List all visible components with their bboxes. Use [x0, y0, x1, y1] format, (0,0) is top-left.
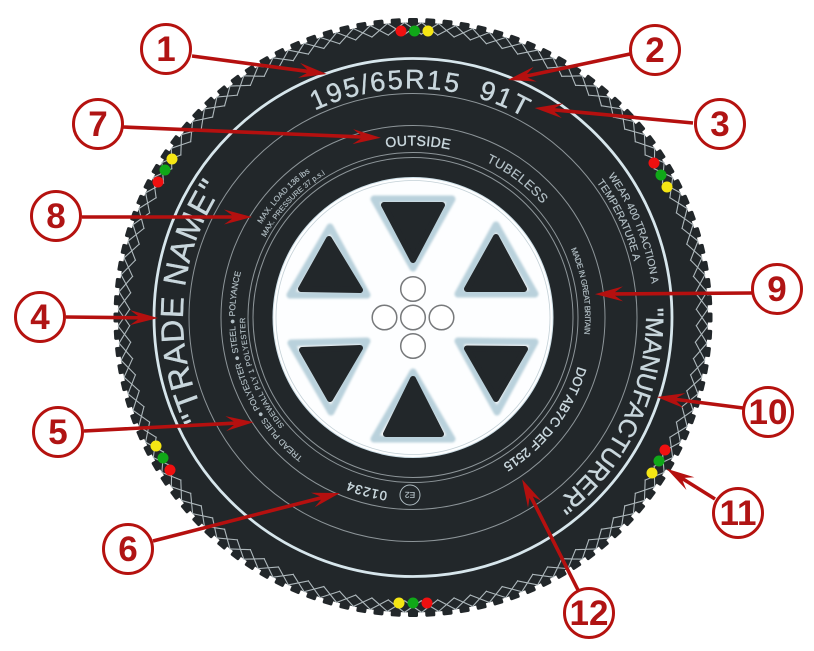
callout badge 12: [564, 588, 614, 638]
callout 8 arrow: [82, 210, 252, 224]
sidewall text: sidewall plies: SIDEWALL PLY 1 POLYESTER: [240, 318, 284, 428]
callout badge 5: [34, 408, 82, 456]
tyre body: [114, 18, 713, 617]
callout badge 9: 9: [767, 270, 787, 309]
sidewall text: manufacturer: "MANUFACTURER": [562, 308, 664, 516]
callout badge 11: [714, 488, 762, 538]
E2 approval mark: [400, 485, 420, 505]
callout 3 arrow: [534, 101, 694, 130]
sidewall text: trade name: "TRADE NAME": [160, 178, 216, 424]
callout 2 arrow: [506, 47, 632, 87]
wheel window halos: [290, 199, 535, 439]
sidewall text: max pressure: MAX. PRESSURE 37 p.s.i: [261, 170, 325, 237]
callout badge 3: [696, 100, 744, 148]
callout badge 2: 2: [645, 31, 665, 70]
callout 1 arrow: [191, 49, 328, 81]
sidewall text: temperature: TEMPERATURE A: [598, 178, 640, 262]
wear indicator dots: upper right: [648, 158, 672, 192]
callout badge 10: [744, 388, 792, 436]
wear indicator dots: lower left: [150, 440, 176, 476]
callout 12 arrow: [515, 476, 585, 593]
alloy wheel: [273, 178, 553, 458]
callout badge 2: [630, 26, 680, 74]
sidewall text: serial number: 01234: [347, 482, 387, 500]
sidewall text: size code: 195/65R15 91T: [310, 70, 532, 114]
wheel bolts: [372, 277, 454, 358]
wear indicator dots: upper left: [152, 154, 178, 188]
wear indicator dots: lower right: [646, 444, 670, 478]
callout badge 7: [74, 100, 122, 148]
callout badge 4: 4: [30, 298, 50, 337]
callout 7 arrow: [123, 120, 381, 145]
sidewall text: outside: OUTSIDE: [386, 136, 451, 150]
callout 6 arrow: [151, 486, 342, 548]
sidewall text: DOT code: DOT AB7C DEF 2515: [504, 367, 586, 472]
sidewall text: max load: MAX. LOAD 136 lbs: [257, 169, 310, 224]
callout badge 3: 3: [710, 105, 730, 144]
sidewall text: tread plies: TREAD PLIES ● POLYESTER ● STEEL ● POLYANCE: [229, 270, 302, 462]
callout badge 6: [104, 524, 152, 574]
sidewall rings: [154, 58, 672, 576]
callout 4 arrow: [66, 310, 158, 325]
callout badge 8: 8: [46, 197, 66, 236]
callout badge 11: 11: [720, 494, 756, 533]
tread pattern: [114, 18, 713, 617]
callout badge 4: [16, 292, 64, 342]
wheel windows: [301, 205, 525, 434]
wear indicator dots: bottom: [394, 598, 432, 608]
callout badge 12: 12: [570, 594, 608, 633]
callout 10 arrow: [656, 390, 744, 415]
sidewall text: tubeless: TUBELESS: [489, 154, 548, 203]
sidewall text: country of manufacture: MADE IN GREAT BRITAIN: [571, 247, 591, 334]
sidewall text: wear and traction: WEAR 400 TRACTION A: [609, 172, 658, 284]
callout badge 1: 1: [156, 30, 176, 69]
callout badge 10: 10: [749, 393, 787, 432]
wear indicator dots: top: [396, 26, 434, 36]
callout badge 8: [32, 192, 80, 240]
callout badge 7: 7: [88, 105, 108, 144]
E2 approval mark: E2: [404, 490, 415, 500]
callout badge 1: [142, 24, 190, 74]
callout 9 arrow: [595, 286, 752, 302]
callout badge 9: [752, 264, 802, 314]
callout 11 arrow: [663, 462, 719, 505]
callout badge 6: 6: [118, 530, 138, 569]
callout badge 5: 5: [48, 413, 68, 452]
callout 5 arrow: [84, 415, 254, 438]
